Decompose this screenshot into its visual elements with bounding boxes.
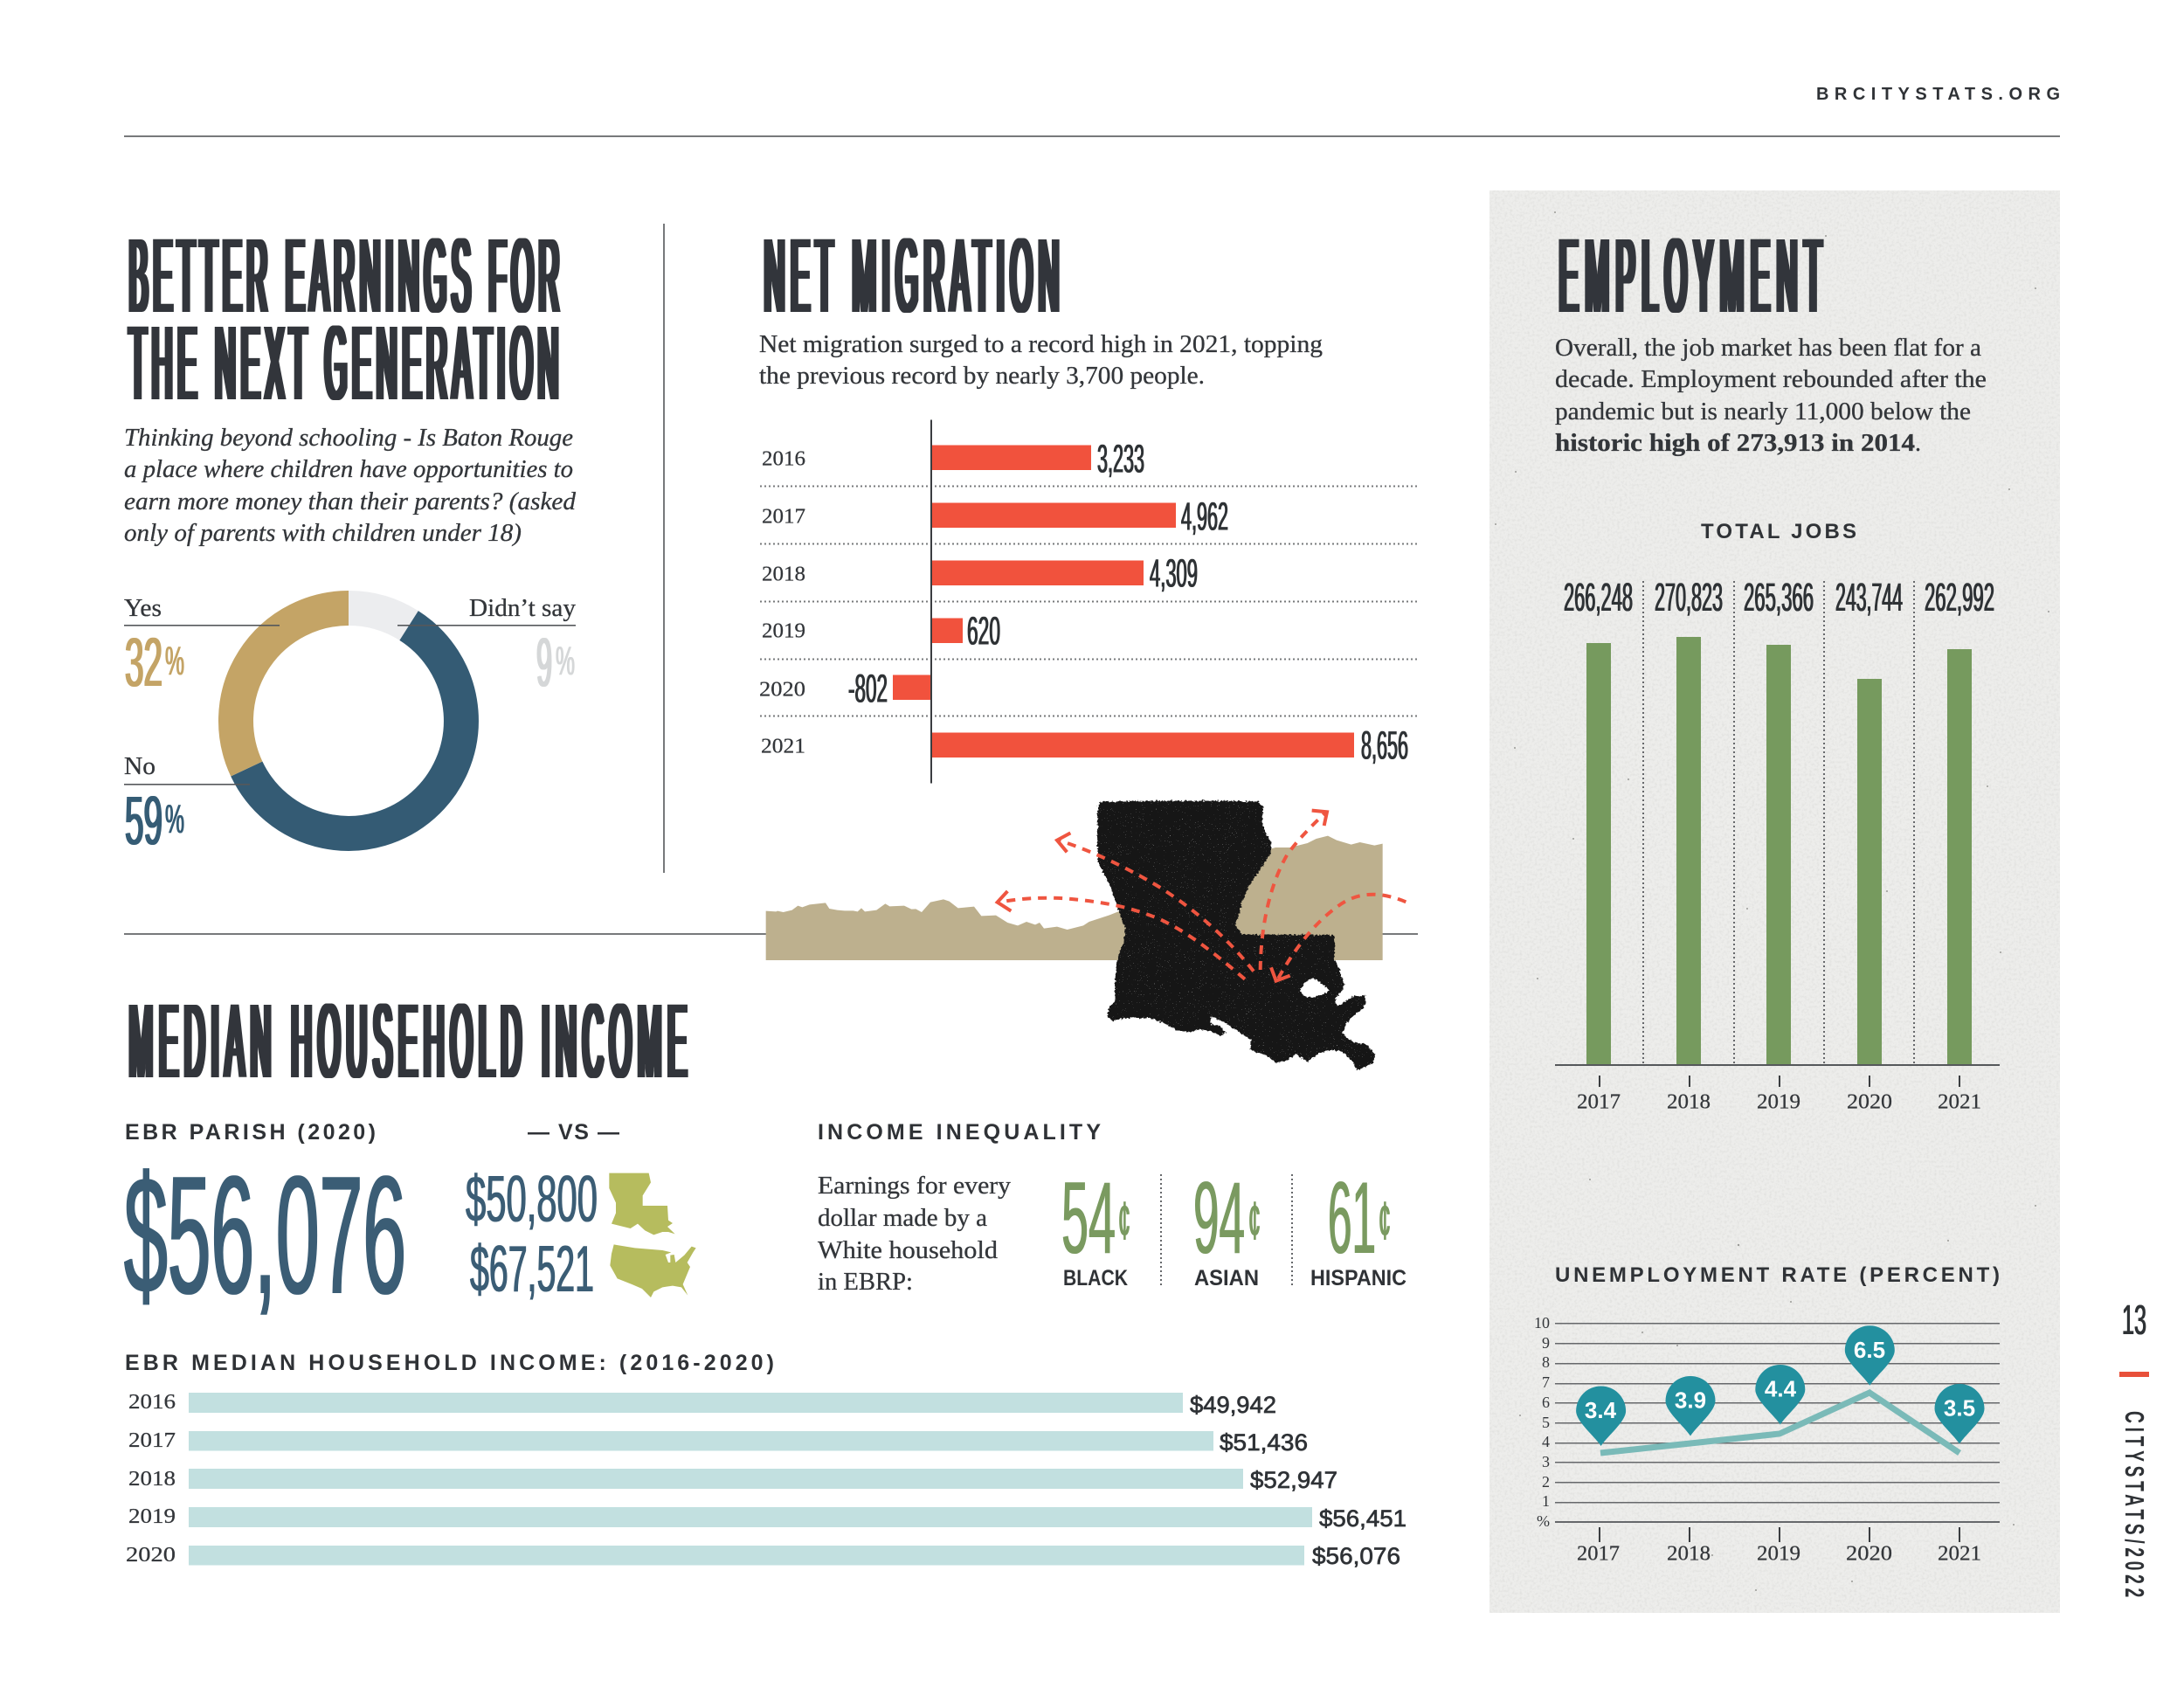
heading: better earnings: BETTER EARNINGS FOR (129, 217, 559, 335)
bar chart: income by year: $51,436 (1220, 1429, 1308, 1456)
bar chart: income by year: $56,076 (1312, 1543, 1400, 1569)
bar chart: net migration: 2016 (762, 447, 805, 470)
subheading: income inequality: INCOME INEQUALITY (818, 1120, 1101, 1145)
bar chart: total jobs: 270,823 (1655, 575, 1723, 619)
line chart: unemployment rate: 8 (1542, 1353, 1550, 1371)
stat: asian households: ASIAN (1194, 1266, 1259, 1290)
legend: yes (124, 595, 280, 701)
bar chart: income by year: $56,451 (1319, 1505, 1406, 1532)
bar chart: net migration: 2019 (762, 620, 805, 643)
legend: yes: 32 (125, 623, 162, 701)
line chart: unemployment rate: 7 (1542, 1373, 1550, 1391)
bar chart: total jobs: 2020 (1847, 1090, 1892, 1113)
stat: black households: 54 (1061, 1160, 1116, 1275)
line chart: unemployment rate: 2019 (1757, 1543, 1800, 1566)
stat: hispanic households: ¢ (1379, 1191, 1391, 1251)
line chart: unemployment rate: 2021 (1938, 1543, 1981, 1566)
legend: no (124, 753, 250, 859)
bar chart: net migration: 3,233 (1097, 437, 1144, 481)
heading: employment: EMPLOYMENT (1559, 217, 1821, 335)
panel: employment (1489, 190, 2060, 1613)
survey question text: a place where children have opportunities to (124, 456, 573, 483)
bar chart: net migration: 2018 (762, 563, 805, 585)
terrain silhouette (766, 836, 1383, 960)
bar chart: income by year: 2019 (128, 1505, 176, 1528)
page number and folio: CITYSTATS/2022 (2119, 1411, 2148, 1597)
line chart: unemployment rate: 2020 (1846, 1543, 1892, 1566)
stat: asian households (1193, 1160, 1261, 1290)
stat: hispanic households: HISPANIC (1310, 1266, 1406, 1290)
bar chart: income by year: 2017 (128, 1429, 176, 1452)
bar chart: total jobs: 2019 (1757, 1090, 1800, 1113)
employment description: pandemic but is nearly 11,000 below the (1555, 398, 1971, 425)
heading: better earnings: THE NEXT GENERATION (129, 304, 558, 422)
website header: BRCITYSTATS.ORG (1816, 85, 2060, 104)
line chart: unemployment rate: 3.5 (1944, 1394, 1975, 1421)
comparison: Louisiana: $50,800 (466, 1162, 598, 1235)
line chart: unemployment rate: 10 (1534, 1314, 1550, 1332)
bar chart: income by year: 2016 (128, 1391, 176, 1414)
migration description: Net migration surged to a record high in 2021, topping (759, 331, 1323, 358)
bar chart: income by year: $49,942 (1190, 1392, 1276, 1418)
employment description: Overall, the job market has been flat for a (1555, 335, 1982, 362)
line chart: unemployment rate: 3.4 (1585, 1397, 1617, 1423)
survey question text: Thinking beyond schooling - Is Baton Rouge (124, 425, 573, 452)
line chart: unemployment rate: 6.5 (1854, 1337, 1885, 1363)
line chart: unemployment rate: % (1537, 1512, 1550, 1530)
bar chart: net migration: 2021 (761, 736, 805, 758)
line chart: unemployment rate: 4 (1542, 1433, 1550, 1450)
heading: better earnings (129, 217, 559, 422)
migration description (759, 331, 1323, 390)
employment description: decade. Employment rebounded after the (1555, 366, 1987, 393)
legend: yes: % (165, 638, 184, 683)
legend: didn't say: % (556, 638, 575, 683)
stat: hispanic households: 61 (1328, 1160, 1376, 1275)
stat: black households: BLACK (1063, 1266, 1128, 1290)
bar chart: total jobs (1555, 575, 2000, 1113)
survey question text: earn more money than their parents? (asked (124, 488, 577, 515)
employment description: historic high of 273,913 in 2014 (1555, 430, 1915, 457)
bar chart: income by year: 2020 (126, 1544, 176, 1567)
line chart: unemployment rate (1534, 1314, 2000, 1566)
bar chart: net migration: 2020 (759, 678, 805, 701)
legend: didn't say: Didn’t say (469, 595, 576, 622)
bar chart: total jobs: 243,744 (1835, 575, 1903, 619)
line chart: unemployment rate: 3 (1542, 1453, 1550, 1470)
bar chart: net migration: -802 (848, 666, 888, 711)
bar chart: total jobs: 266,248 (1564, 575, 1633, 619)
bar chart: total jobs: 265,366 (1744, 575, 1814, 619)
bar chart: net migration (759, 419, 1418, 783)
bar chart: net migration: 620 (967, 608, 1000, 654)
employment description (1555, 335, 1987, 457)
chart title: total jobs: TOTAL JOBS (1701, 520, 1856, 543)
legend: no: 59 (125, 781, 162, 859)
line chart: unemployment rate: 6 (1542, 1394, 1550, 1411)
heading: net migration: NET MIGRATION (764, 217, 1059, 335)
page number and folio: 13 (2122, 1297, 2146, 1344)
migration arrows (998, 811, 1406, 981)
comparison: United States: $67,521 (470, 1232, 594, 1305)
bar chart: total jobs: 2017 (1577, 1090, 1621, 1113)
panel: better earnings (124, 217, 577, 859)
legend: didn't say: 9 (536, 623, 552, 701)
inequality description (818, 1173, 1011, 1296)
legend: no: % (165, 796, 184, 841)
chart title: unemployment rate: UNEMPLOYMENT RATE (PERCENT) (1555, 1263, 2000, 1287)
line chart: unemployment rate: 1 (1542, 1492, 1550, 1510)
panel: median household income: ¢ (1118, 1191, 1130, 1251)
migration description: the previous record by nearly 3,700 people. (759, 363, 1205, 390)
bar chart: total jobs: 2018 (1667, 1090, 1711, 1113)
inequality description: in EBRP: (818, 1269, 913, 1296)
survey question text (124, 425, 577, 547)
line chart: unemployment rate: 3.9 (1675, 1387, 1706, 1414)
subheading: EBR parish: EBR PARISH (2020) (125, 1120, 376, 1145)
panel: net migration (759, 217, 1418, 783)
donut chart (236, 608, 461, 834)
stat: asian households: 94 (1193, 1160, 1245, 1275)
page number and folio (2119, 1297, 2149, 1597)
panel: median household income: $56,076 (124, 1140, 406, 1329)
icon: United States (610, 1244, 696, 1297)
Louisiana map (1097, 801, 1375, 1070)
stat: black households (1061, 1160, 1130, 1290)
legend: yes: Yes (124, 595, 162, 622)
inequality description: White household (818, 1237, 998, 1264)
line chart: unemployment rate: 2 (1542, 1473, 1550, 1491)
stat: hispanic households (1310, 1160, 1406, 1290)
illustration: terrain and Louisiana map with migration arrows (766, 801, 1406, 1070)
bar chart: total jobs: 2021 (1938, 1090, 1981, 1113)
panel: median household income: ¢ (1248, 1191, 1261, 1251)
icon: Louisiana (609, 1173, 675, 1235)
inequality description: dollar made by a (818, 1205, 988, 1232)
line chart: unemployment rate: 2017 (1577, 1543, 1620, 1566)
legend: didn't say (397, 595, 576, 701)
subheading: versus: — VS — (528, 1120, 619, 1145)
bar chart: income by year (126, 1391, 1406, 1569)
line chart: unemployment rate: 5 (1542, 1414, 1550, 1431)
legend: no: No (124, 753, 156, 780)
bar chart: income by year: $52,947 (1250, 1467, 1337, 1493)
panel: median household income (124, 982, 1406, 1569)
inequality description: Earnings for every (818, 1173, 1011, 1200)
bar chart: net migration: 2017 (762, 505, 805, 528)
employment description: . (1915, 430, 1921, 457)
bar chart: net migration: 8,656 (1361, 723, 1408, 767)
bar chart: net migration: 4,309 (1150, 550, 1198, 596)
line chart: unemployment rate: 9 (1542, 1334, 1550, 1352)
survey question text: only of parents with children under 18) (124, 520, 522, 547)
bar chart: income by year: 2018 (128, 1468, 176, 1491)
bar chart: net migration: 4,962 (1181, 495, 1228, 538)
heading: median household income: MEDIAN HOUSEHOLD INCOME (129, 982, 687, 1100)
subheading: income history: EBR MEDIAN HOUSEHOLD INCOME: (2016-2020) (125, 1351, 774, 1375)
line chart: unemployment rate: 2018 (1667, 1543, 1711, 1566)
bar chart: total jobs: 262,992 (1925, 575, 1994, 619)
line chart: unemployment rate: 4.4 (1765, 1375, 1797, 1401)
